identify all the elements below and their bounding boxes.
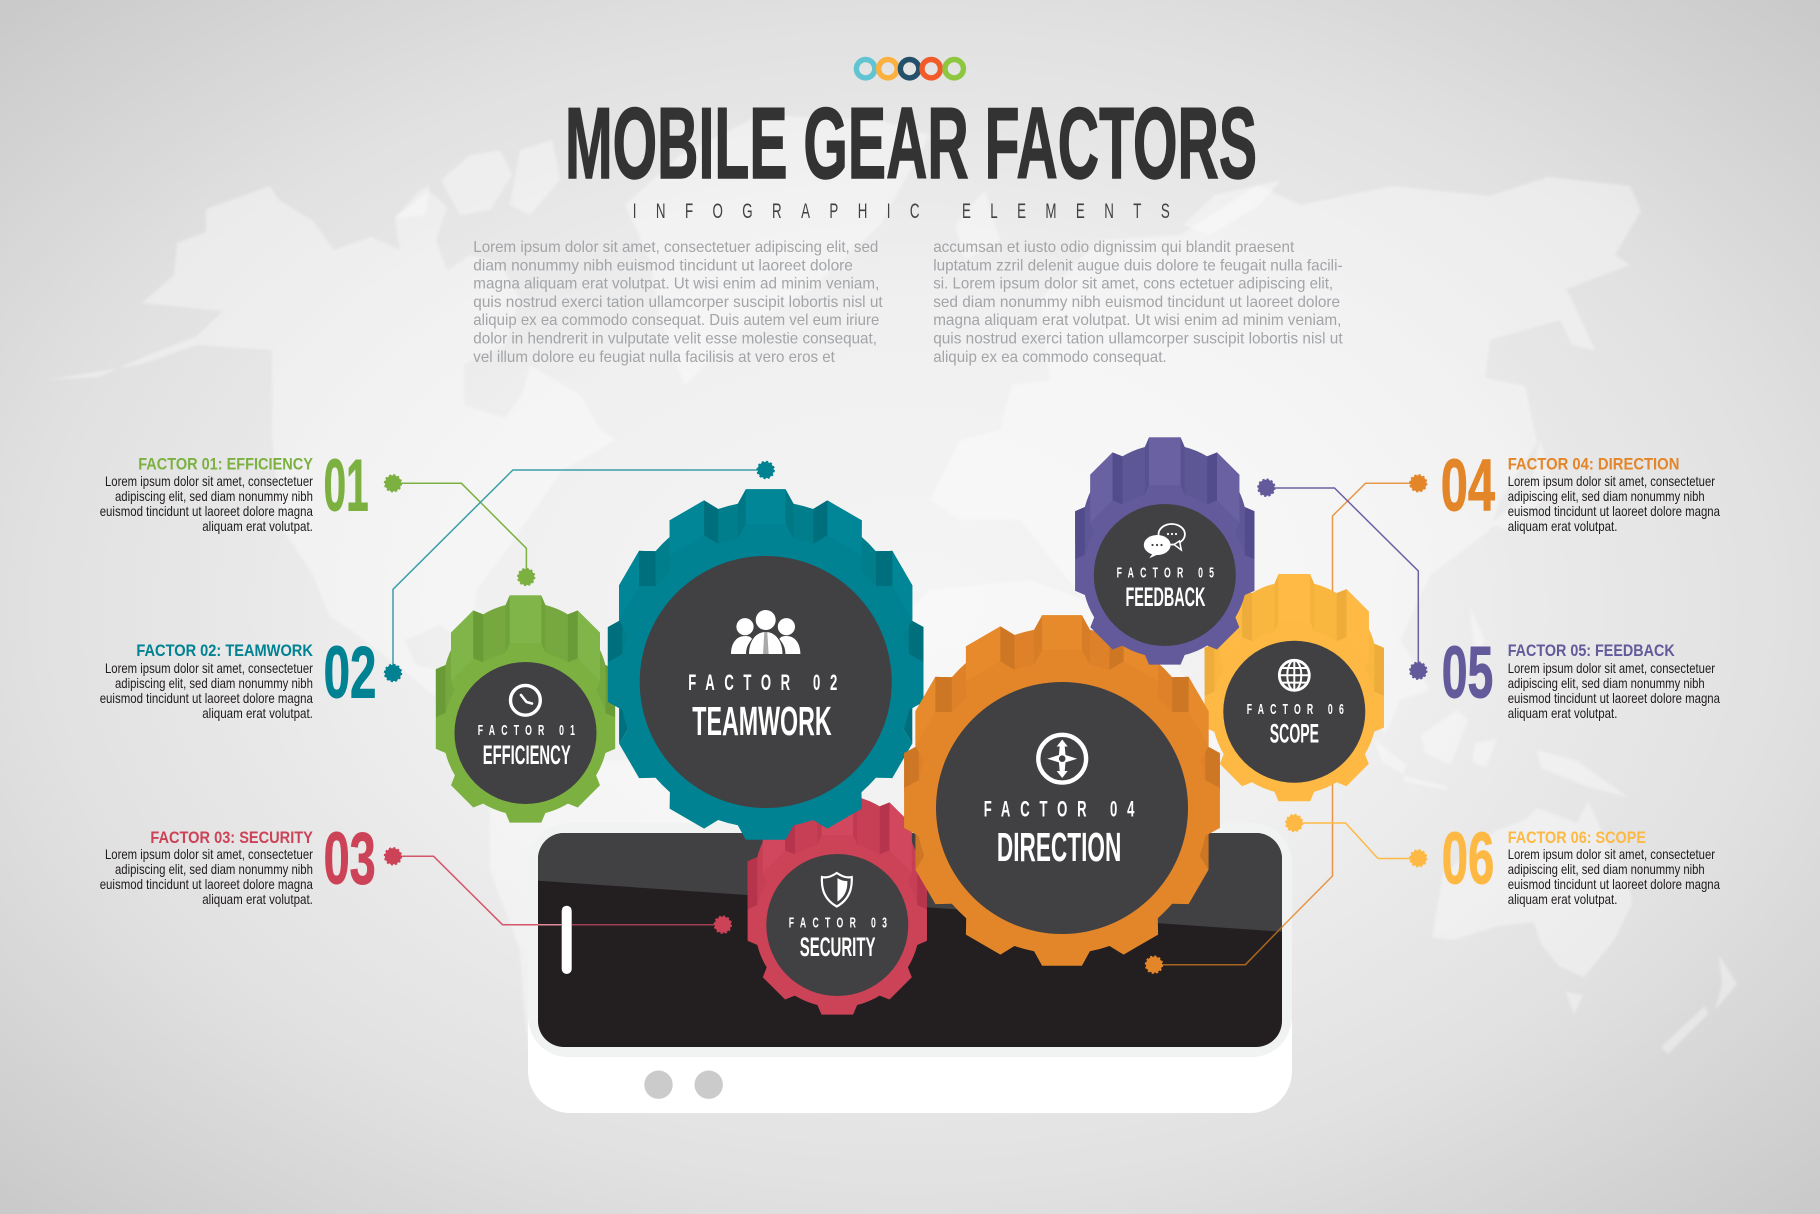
factor 05 text block: aliquam erat volutpat. xyxy=(1508,705,1617,721)
factor 04 text block: euismod tincidunt ut laoreet dolore magna xyxy=(1508,503,1720,519)
intro text: column 1: quis nostrud exerci tation ullamcorper suscipit lobortis nisl ut xyxy=(473,294,883,311)
gear 04: direction xyxy=(904,615,1220,966)
connector lines xyxy=(393,470,1418,965)
gear 02: teamwork: TEAMWORK xyxy=(692,698,832,744)
intro text: column 1: dolor in hendrerit in vulputate velit esse molestie consequat, xyxy=(473,330,877,348)
factor 06 text block xyxy=(1508,829,1720,907)
factor 02 text block xyxy=(100,642,313,721)
number 04: 04 xyxy=(1441,445,1495,526)
gear 03: security xyxy=(748,787,927,1015)
gear 05: feedback xyxy=(1075,437,1254,665)
factor 05 text block: adipiscing elit, sed diam nonummy nibh xyxy=(1508,675,1705,691)
gear 02: teamwork: FACTOR 02 xyxy=(688,671,837,695)
factor 01 text block: Lorem ipsum dolor sit amet, consectetuer xyxy=(105,473,313,489)
icon: chat bubbles xyxy=(1144,524,1185,558)
home pill xyxy=(562,906,572,974)
icon: globe xyxy=(1279,660,1309,691)
factor 01 text block: FACTOR 01: EFFICIENCY xyxy=(138,456,313,474)
factor 02 text block: FACTOR 02: TEAMWORK xyxy=(136,642,313,660)
phone buttons xyxy=(644,1070,723,1099)
gear 06: scope: FACTOR 06 xyxy=(1247,701,1344,718)
number 05: 05 xyxy=(1442,632,1493,713)
icon: shield xyxy=(822,873,852,906)
gear 04: direction: DIRECTION xyxy=(997,824,1121,870)
gear 03: security: SECURITY xyxy=(800,932,876,962)
factor 02 text block: adipiscing elit, sed diam nonummy nibh xyxy=(115,675,313,691)
intro text: column 2: luptatum zzril delenit augue duis dolore te feugait nulla facili- xyxy=(933,257,1343,274)
icon: clock xyxy=(511,685,540,715)
gear 06: scope: SCOPE xyxy=(1270,719,1319,749)
factor 04 text block xyxy=(1508,456,1720,534)
title: MOBILE GEAR FACTORS xyxy=(565,88,1257,200)
factor 01 text block: adipiscing elit, sed diam nonummy nibh xyxy=(115,488,313,504)
factor 04 text block: aliquam erat volutpat. xyxy=(1508,518,1617,534)
gear 04: direction: FACTOR 04 xyxy=(984,797,1134,822)
intro text: column 2 xyxy=(933,239,1343,366)
intro text: column 1: aliquip ex ea commodo consequat. Duis autem vel eum iriure xyxy=(473,312,879,329)
factor 02 text block: euismod tincidunt ut laoreet dolore magna xyxy=(100,690,313,706)
gear 03: security: FACTOR 03 xyxy=(789,914,887,931)
number 06: 06 xyxy=(1442,819,1494,900)
gear 01: efficiency xyxy=(436,595,615,823)
factor 05 text block: euismod tincidunt ut laoreet dolore magna xyxy=(1508,690,1720,706)
factor 04 text block: adipiscing elit, sed diam nonummy nibh xyxy=(1508,488,1705,504)
factor 06 text block: FACTOR 06: SCOPE xyxy=(1508,829,1646,847)
icon: team of people xyxy=(731,610,800,654)
connector dots xyxy=(385,462,1426,973)
factor 02 text block: aliquam erat volutpat. xyxy=(202,705,313,721)
factor 06 text block: adipiscing elit, sed diam nonummy nibh xyxy=(1508,861,1705,877)
logo rings xyxy=(856,59,963,78)
factor 03 text block xyxy=(100,829,313,907)
gear 02: teamwork xyxy=(608,489,924,840)
world map background xyxy=(46,115,1737,1100)
number 03: 03 xyxy=(324,819,376,900)
number 01: 01 xyxy=(324,445,369,526)
gear 05: feedback: FEEDBACK xyxy=(1126,582,1205,612)
factor 01 text block: aliquam erat volutpat. xyxy=(202,518,313,534)
intro text: column 2: magna aliquam erat volutpat. Ut wisi enim ad minim veniam, xyxy=(933,312,1341,329)
factor 06 text block: aliquam erat volutpat. xyxy=(1508,891,1617,907)
factor 03 text block: Lorem ipsum dolor sit amet, consectetuer xyxy=(105,846,313,862)
phone screen xyxy=(538,833,1282,1047)
factor 02 text block: Lorem ipsum dolor sit amet, consectetuer xyxy=(105,660,313,676)
intro text: column 2: accumsan et iusto odio dignissim qui blandit praesent xyxy=(933,239,1295,256)
factor 01 text block xyxy=(100,456,313,534)
intro text: column 1: vel illum dolore eu feugiat nulla facilisis at vero eros et xyxy=(473,349,835,366)
phone device xyxy=(528,823,1292,1113)
factor 03 text block: adipiscing elit, sed diam nonummy nibh xyxy=(115,861,313,877)
factor 04 text block: Lorem ipsum dolor sit amet, consectetuer xyxy=(1508,473,1715,489)
factor 03 text block: aliquam erat volutpat. xyxy=(202,891,313,907)
intro text: column 1: diam nonummy nibh euismod tincidunt ut laoreet dolore xyxy=(473,257,853,274)
icon: compass xyxy=(1038,735,1086,783)
intro text: column 2: sed diam nonummy nibh euismod tincidunt ut laoreet dolore xyxy=(933,294,1340,311)
intro text: column 2: si. Lorem ipsum dolor sit amet, cons ectetuer adipiscing elit, xyxy=(933,276,1333,293)
factor 06 text block: euismod tincidunt ut laoreet dolore magna xyxy=(1508,876,1720,892)
intro text: column 1 xyxy=(473,239,883,366)
intro text: column 1: magna aliquam erat volutpat. Ut wisi enim ad minim veniam, xyxy=(473,276,879,293)
gear 01: efficiency: FACTOR 01 xyxy=(478,722,575,739)
number 02: 02 xyxy=(324,632,376,713)
intro text: column 2: aliquip ex ea commodo consequat. xyxy=(933,349,1167,366)
factor 03 text block: euismod tincidunt ut laoreet dolore magna xyxy=(100,876,313,892)
subtitle: INFOGRAPHIC ELEMENTS xyxy=(633,199,1170,223)
factor 03 text block: FACTOR 03: SECURITY xyxy=(150,829,313,847)
factor 05 text block: Lorem ipsum dolor sit amet, consectetuer xyxy=(1508,660,1715,676)
factor 04 text block: FACTOR 04: DIRECTION xyxy=(1508,456,1679,474)
factor 01 text block: euismod tincidunt ut laoreet dolore magna xyxy=(100,503,313,519)
factor 05 text block xyxy=(1508,642,1720,721)
intro text: column 2: quis nostrud exerci tation ullamcorper suscipit lobortis nisl ut xyxy=(933,330,1343,348)
factor 06 text block: Lorem ipsum dolor sit amet, consectetuer xyxy=(1508,846,1715,862)
gear 05: feedback: FACTOR 05 xyxy=(1117,564,1214,581)
factor 05 text block: FACTOR 05: FEEDBACK xyxy=(1508,642,1675,660)
gear 06: scope xyxy=(1205,574,1384,801)
gear 01: efficiency: EFFICIENCY xyxy=(483,740,571,770)
intro text: column 1: Lorem ipsum dolor sit amet, consectetuer adipiscing elit, sed xyxy=(473,239,878,256)
